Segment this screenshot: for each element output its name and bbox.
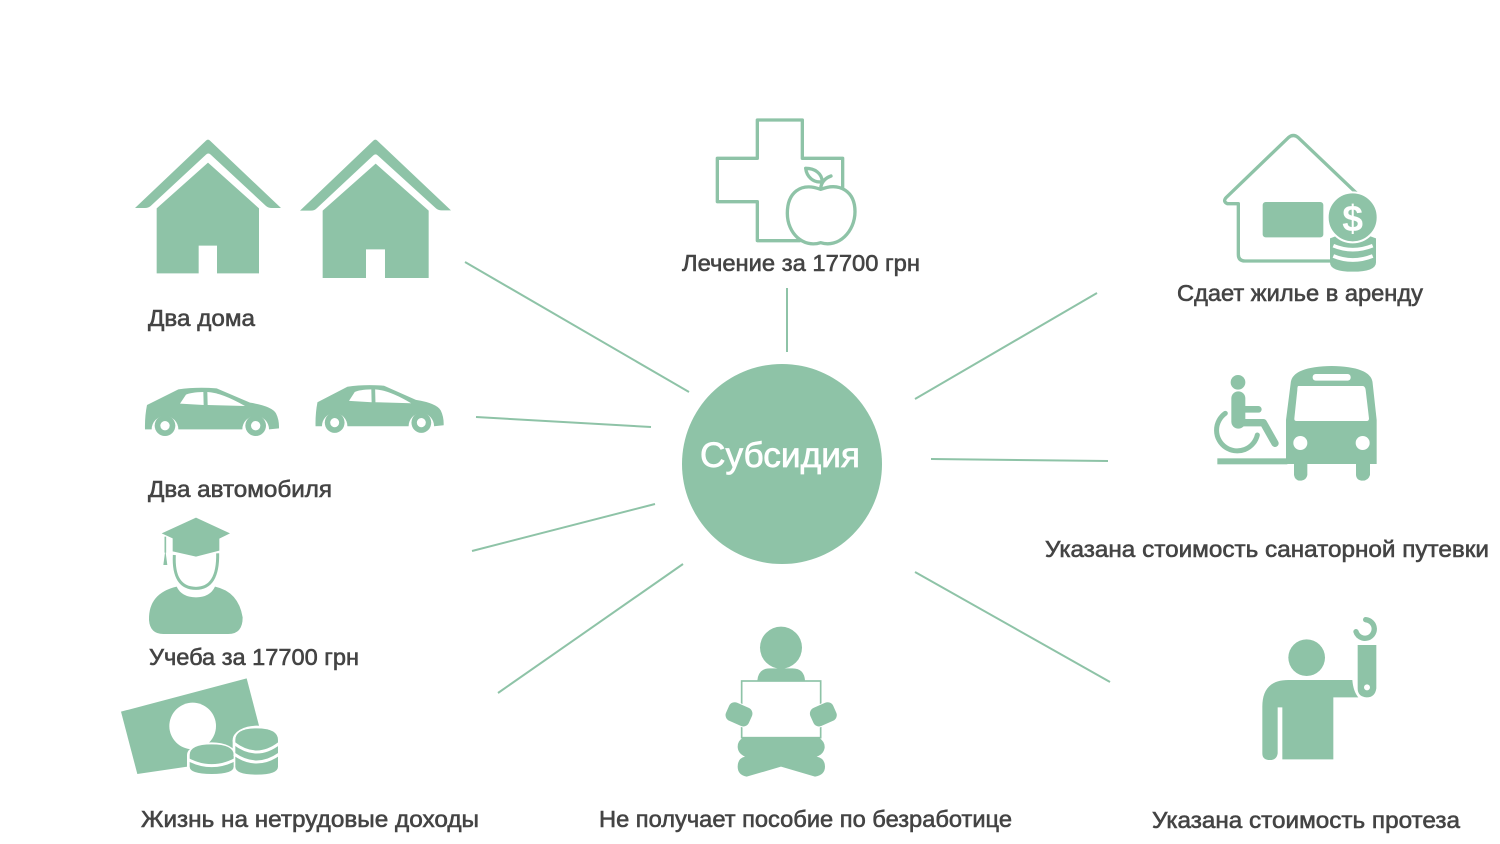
central circle: subsidy: Субсидия: [700, 436, 860, 475]
connector lines: [465, 262, 1110, 693]
central circle: subsidy: [682, 364, 882, 564]
label: two cars: Два автомобиля: [148, 476, 332, 502]
label: rents out housing: Сдает жилье в аренду: [1177, 280, 1423, 306]
label: two houses: Два дома: [148, 305, 256, 331]
icon: medical cross with apple: [717, 120, 855, 244]
icon: person reading a newspaper: [723, 627, 839, 777]
label: tuition: Учеба за 17700 грн: [149, 644, 359, 670]
icon: two houses: [135, 140, 451, 278]
label: no unemployment benefit: Не получает пособие по безработице: [599, 806, 1012, 832]
icon: rented house with coins: [1225, 135, 1378, 272]
icon: two cars: [145, 385, 444, 436]
icon: rented house with coins: $: [1342, 197, 1363, 239]
label: treatment: Лечение за 17700 грн: [682, 250, 920, 276]
label: prosthesis: Указана стоимость протеза: [1152, 807, 1461, 833]
icon: person with prosthesis: [1262, 620, 1376, 760]
label: non-labour income: Жизнь на нетрудовые доходы: [141, 806, 479, 832]
icon: banknote and coins: [121, 678, 281, 777]
label: sanatorium voucher: Указана стоимость санаторной путевки: [1045, 536, 1489, 562]
icon: student with graduation cap: [149, 518, 243, 634]
icon: wheelchair and bus: [1217, 366, 1377, 481]
